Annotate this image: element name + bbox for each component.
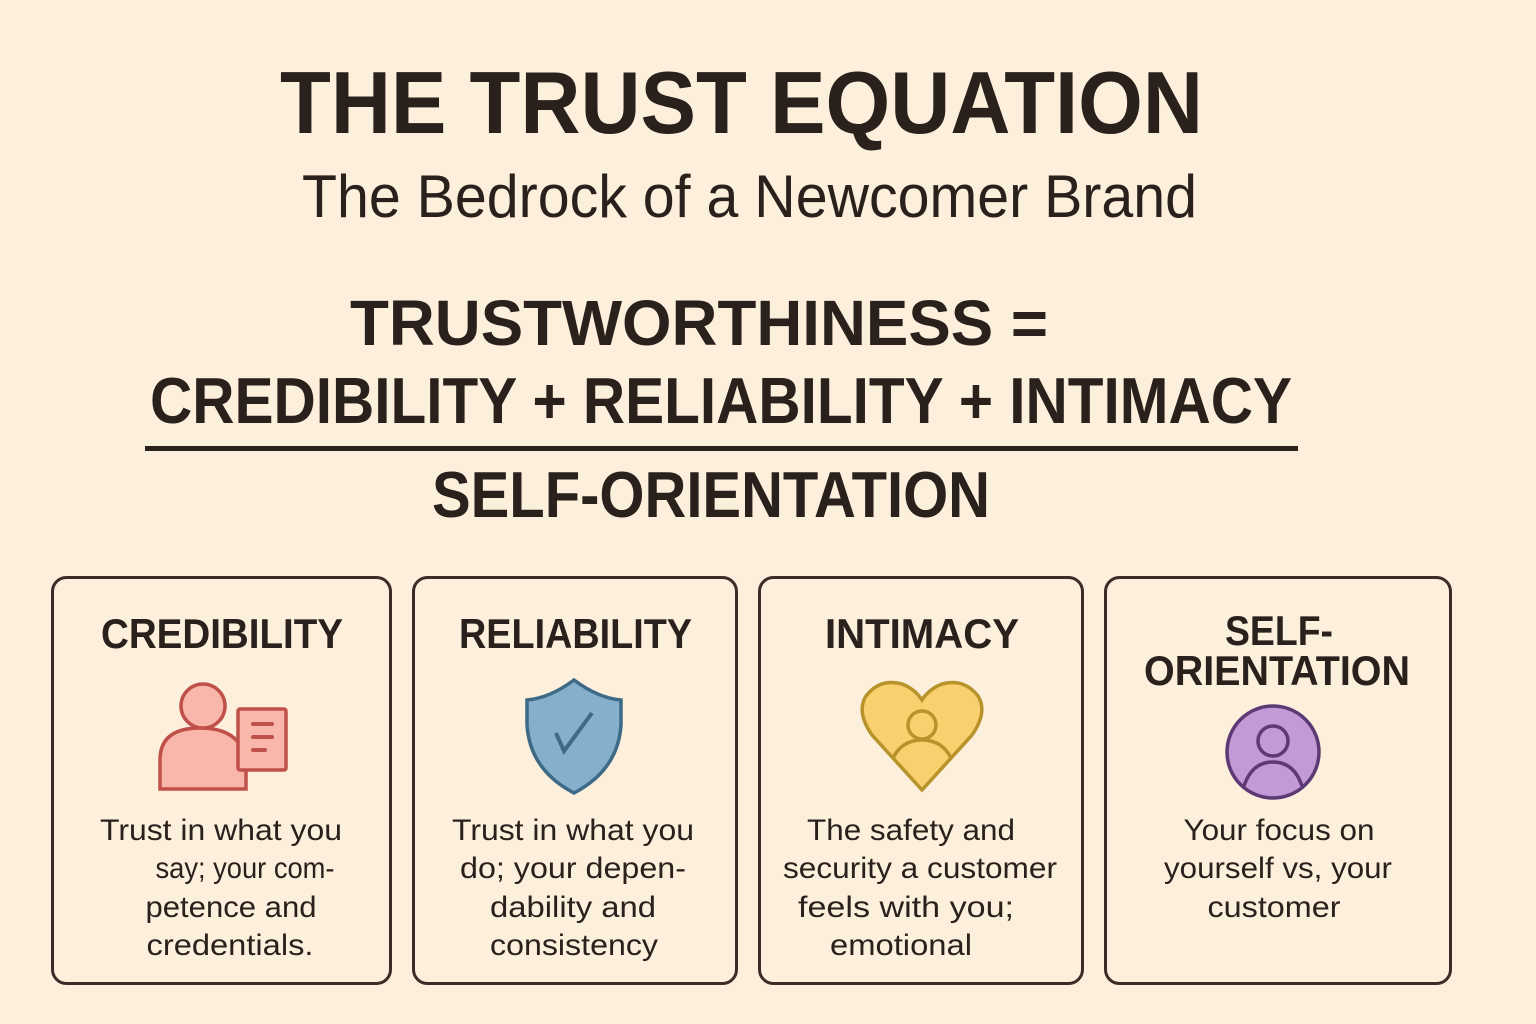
icon: person in circle xyxy=(1227,706,1319,798)
subtitle: The Bedrock of a Newcomer Brand xyxy=(302,163,1197,230)
text: credibility description: say; your com- xyxy=(156,852,334,885)
text: reliability description: do; your depen- xyxy=(460,852,686,885)
icon: heart with person xyxy=(862,682,982,790)
panel: intimacy xyxy=(760,578,1082,984)
equation: TRUSTWORTHINESS = xyxy=(350,287,1048,359)
panel: self-orientation: ORIENTATION xyxy=(1144,647,1410,694)
panel: self-orientation xyxy=(1106,578,1450,984)
text: credibility description xyxy=(100,814,342,962)
panel: intimacy: INTIMACY xyxy=(825,610,1019,657)
text: intimacy description: emotional xyxy=(830,929,972,962)
text: reliability description: consistency xyxy=(490,929,658,962)
equation: SELF-ORIENTATION xyxy=(432,458,990,531)
text: intimacy description: The safety and xyxy=(807,814,1015,847)
equation xyxy=(145,287,1298,531)
text: reliability description: Trust in what you xyxy=(452,814,694,847)
panel: self-orientation: SELF- xyxy=(1225,607,1333,654)
text: reliability description: dability and xyxy=(490,891,656,924)
text: self-orientation description: Your focus on xyxy=(1184,814,1374,847)
title: THE TRUST EQUATION xyxy=(280,53,1203,152)
text: intimacy description: security a customer xyxy=(783,852,1057,885)
panel: reliability: RELIABILITY xyxy=(459,610,692,657)
panel: credibility: CREDIBILITY xyxy=(101,610,343,657)
text: credibility description: credentials. xyxy=(146,929,314,962)
text: reliability description xyxy=(452,814,694,962)
text: credibility description: Trust in what you xyxy=(100,814,342,847)
text: intimacy description xyxy=(783,814,1057,962)
panel: reliability xyxy=(414,578,736,984)
icon: person with document xyxy=(160,684,286,789)
equation: CREDIBILITY + RELIABILITY + INTIMACY xyxy=(150,364,1292,437)
text: credibility description: petence and xyxy=(146,891,316,924)
panel: credibility xyxy=(52,578,390,984)
text: self-orientation description: yourself vs, your xyxy=(1164,852,1392,885)
text: intimacy description: feels with you; xyxy=(798,891,1014,924)
text: self-orientation description: customer xyxy=(1208,891,1341,924)
icon: shield xyxy=(527,680,621,793)
text: self-orientation description xyxy=(1164,814,1392,924)
